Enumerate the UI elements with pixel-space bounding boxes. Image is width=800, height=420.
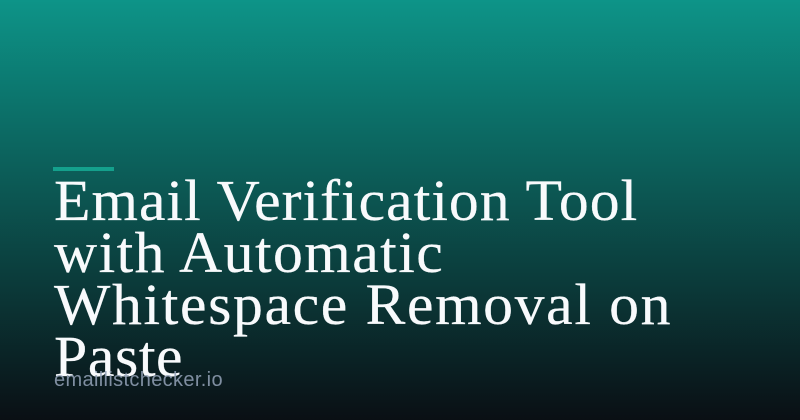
domain label: emaillistchecker.io — [54, 369, 223, 391]
accent bar — [53, 167, 114, 171]
title: with Automatic — [54, 220, 444, 285]
title: Whitespace Removal on — [54, 272, 672, 337]
title: Paste — [54, 324, 183, 389]
title — [54, 168, 672, 389]
title: Email Verification Tool — [54, 168, 638, 233]
